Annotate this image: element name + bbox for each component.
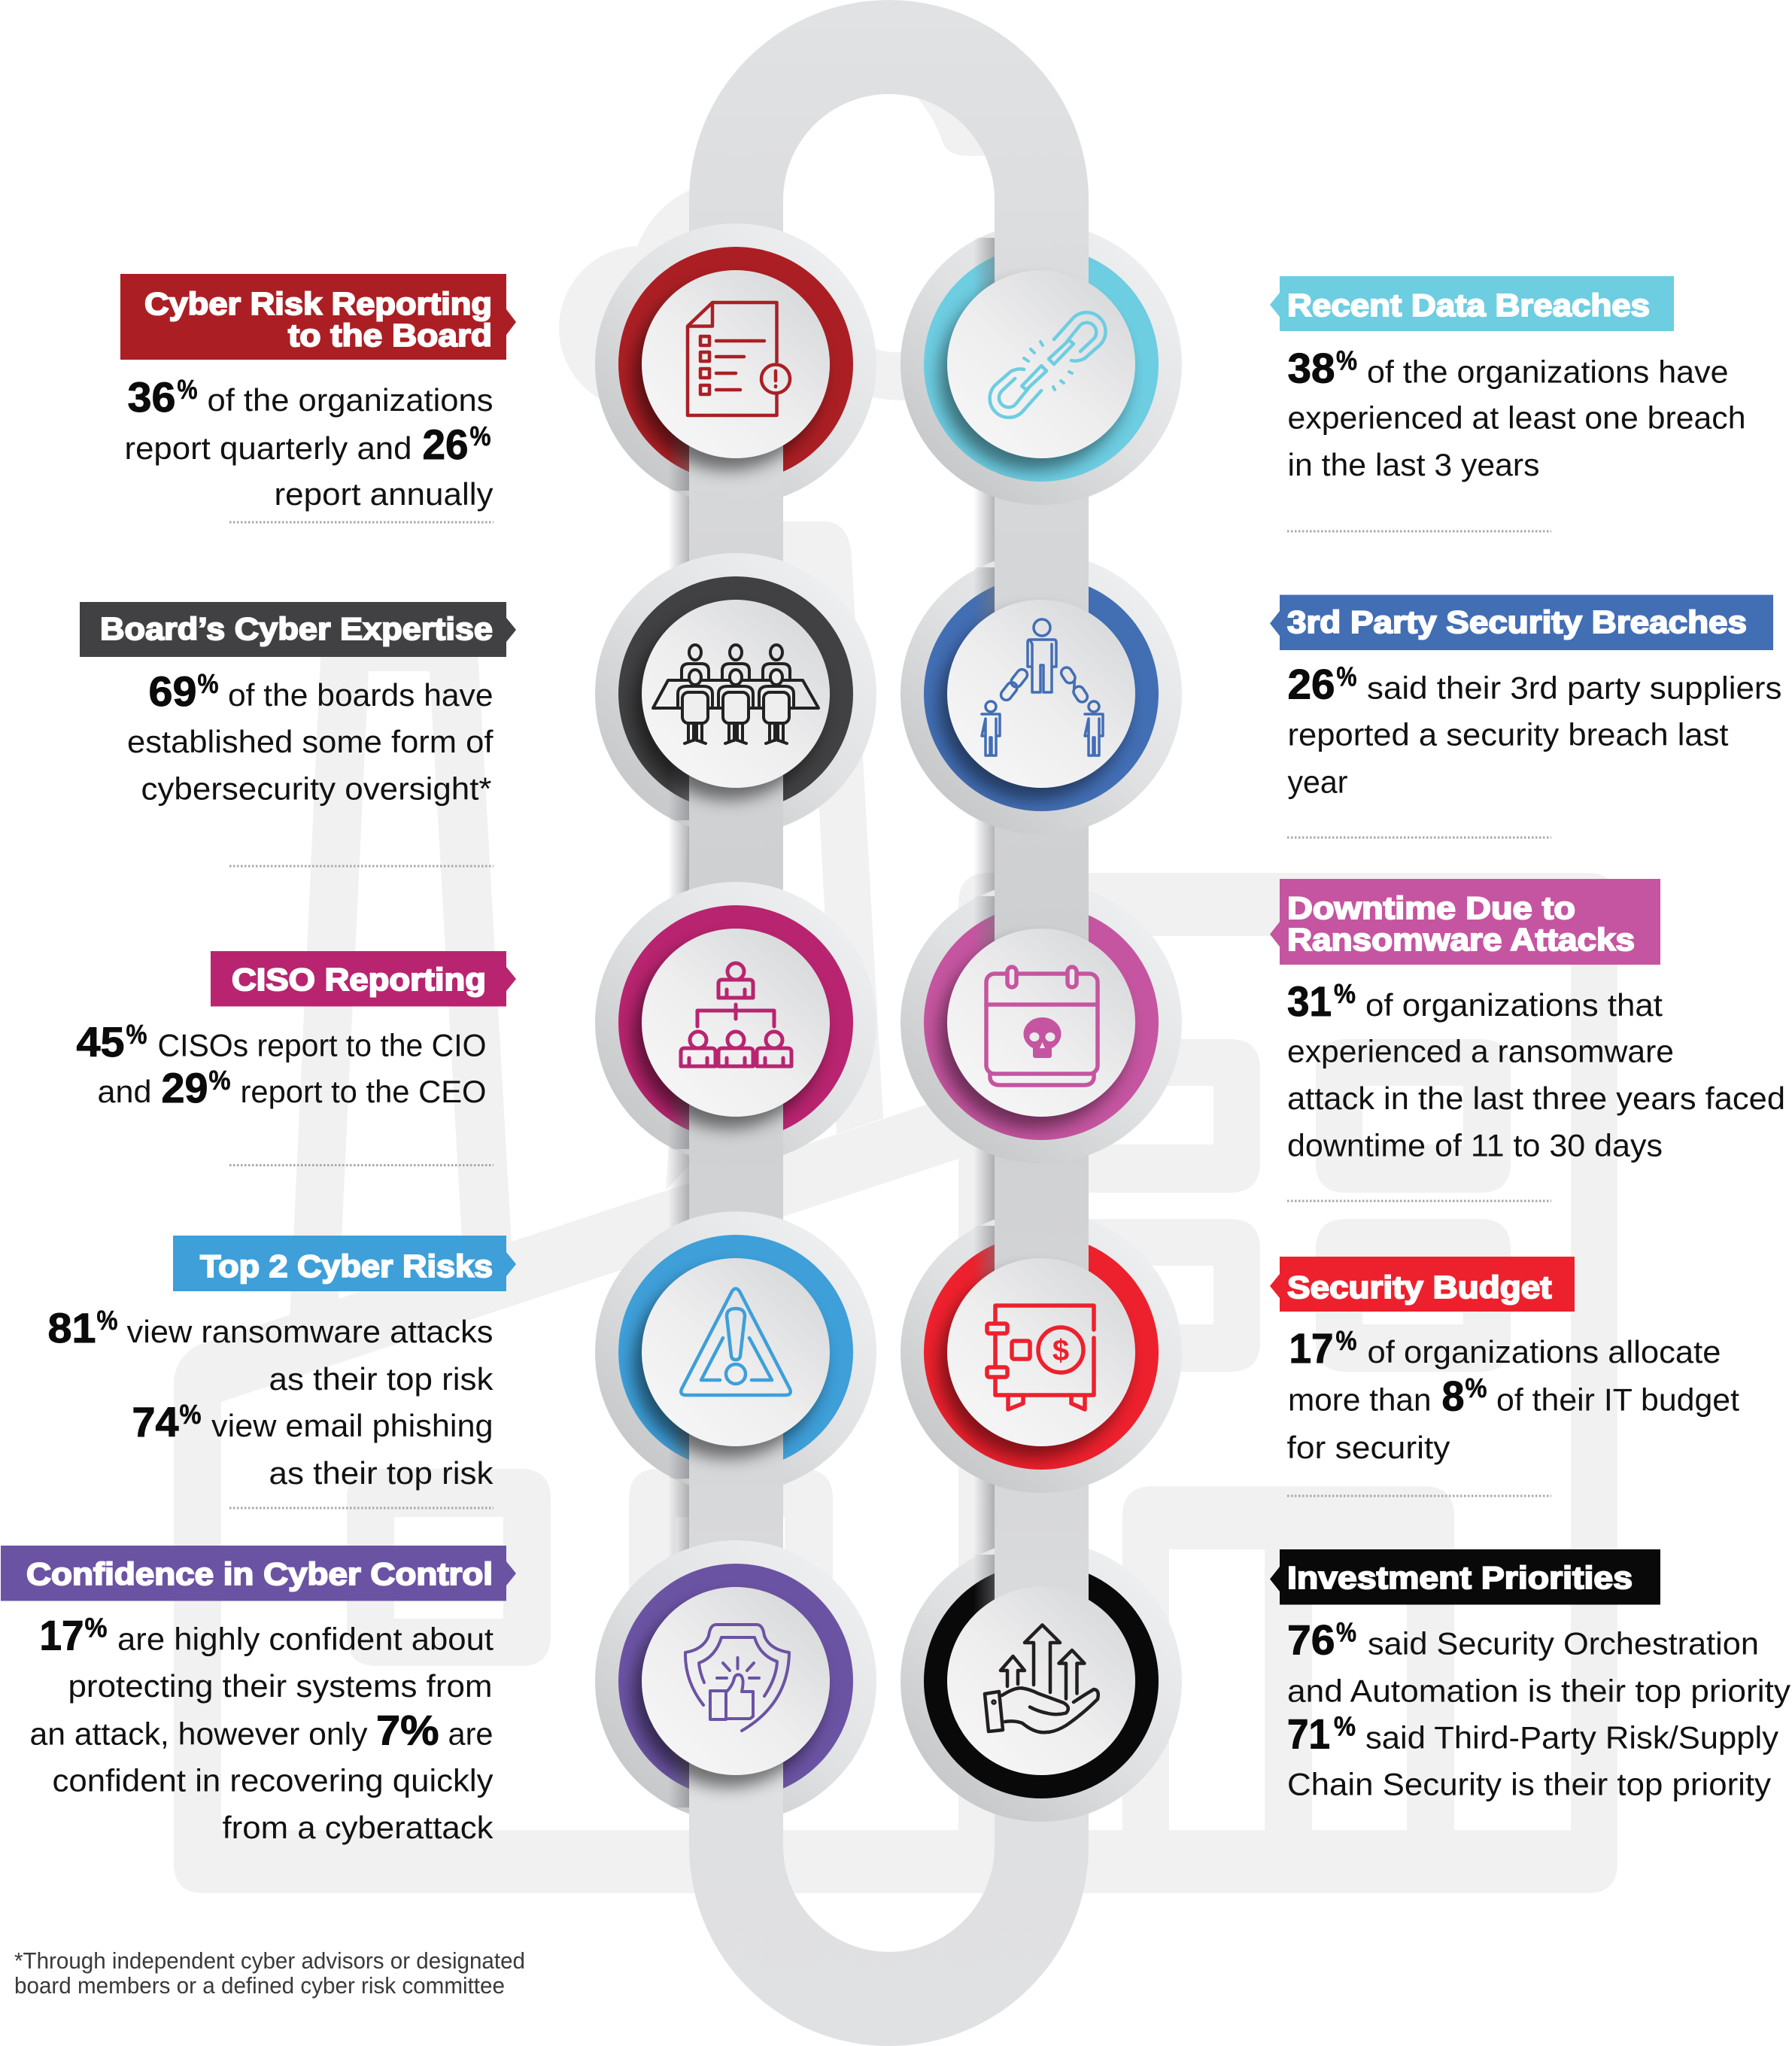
stat text: % <box>1336 1325 1357 1356</box>
stat text: established some form of <box>127 724 494 759</box>
footnote <box>14 1947 525 1999</box>
stat text: as their top risk <box>269 1361 494 1397</box>
panel: recent data breaches <box>1270 276 1745 482</box>
stat text: 31 <box>1287 977 1332 1025</box>
stat text: report to the CEO <box>241 1074 486 1109</box>
stat text <box>48 1304 494 1491</box>
footnote: board members or a defined cyber risk committee <box>14 1972 505 1999</box>
stat text: % <box>84 1612 107 1643</box>
stat text: 17 <box>39 1612 84 1658</box>
icon: document with alert <box>688 302 790 415</box>
stat text: attack in the last three years faced <box>1287 1081 1785 1116</box>
stat text: 8 <box>1441 1373 1464 1419</box>
banner heading: Confidence in Cyber Control <box>26 1556 493 1592</box>
stat text: % <box>1334 1711 1356 1741</box>
icon: warning triangle <box>681 1288 791 1395</box>
stat text <box>77 1018 486 1111</box>
banner heading: to the Board <box>288 318 492 353</box>
banner heading <box>1270 1549 1660 1604</box>
banner heading: Cyber Risk Reporting <box>144 286 492 321</box>
panel: third party security breaches <box>1270 594 1781 799</box>
stat text <box>1286 1324 1739 1465</box>
panel: downtime due to ransomware <box>1270 879 1785 1163</box>
stat text: 17 <box>1289 1324 1333 1372</box>
stat text: % <box>1465 1373 1487 1403</box>
banner heading <box>1270 1257 1575 1312</box>
stat text: 26 <box>423 421 468 468</box>
stat text: of their IT budget <box>1496 1382 1739 1418</box>
band side shadows <box>668 451 995 1686</box>
stat text: protecting their systems from <box>68 1668 492 1704</box>
badge: board cyber expertise <box>595 553 876 844</box>
stat text: 26 <box>1288 661 1335 707</box>
badge: recent data breaches <box>901 214 1182 505</box>
stat text: % <box>469 421 491 451</box>
stat text: % <box>96 1305 117 1336</box>
panel: investment priorities <box>1270 1549 1790 1801</box>
stat text: % <box>1336 345 1357 376</box>
stat text: said their 3rd party suppliers <box>1367 670 1781 706</box>
stat text <box>127 667 494 807</box>
banner heading: Board’s Cyber Expertise <box>100 611 493 646</box>
icon: calendar with skull <box>986 967 1098 1085</box>
badge: top cyber risks <box>595 1211 876 1503</box>
stat text: % <box>178 374 197 405</box>
banner heading: Downtime Due to <box>1287 890 1575 926</box>
icon: shield with thumbs up <box>685 1625 789 1731</box>
stat text: cybersecurity oversight* <box>141 771 492 807</box>
stat text: for security <box>1286 1430 1450 1465</box>
stat text: of organizations that <box>1365 987 1663 1023</box>
stat text: from a cyberattack <box>223 1810 494 1845</box>
footnote: *Through independent cyber advisors or designated <box>14 1947 525 1974</box>
banner heading <box>1270 879 1660 965</box>
stat text: said Third-Party Risk/Supply <box>1365 1720 1778 1755</box>
stat text: CISOs report to the CIO <box>158 1028 486 1063</box>
stat text: Chain Security is their top priority <box>1287 1767 1771 1801</box>
panel: ciso reporting <box>77 951 516 1111</box>
stat text: 74 <box>132 1398 179 1446</box>
stat text: as their top risk <box>269 1455 494 1491</box>
stat text: said Security Orchestration <box>1368 1625 1759 1661</box>
icon: safe with dollar: $ <box>1052 1334 1069 1367</box>
stat text: 69 <box>149 667 197 715</box>
stat text: 36 <box>128 373 176 421</box>
stat text: downtime of 11 to 30 days <box>1287 1127 1663 1163</box>
banner heading <box>80 602 516 657</box>
stat text: in the last 3 years <box>1288 447 1539 482</box>
stat text: % <box>197 668 218 699</box>
badge: ciso reporting <box>595 882 876 1173</box>
banner heading <box>173 1236 516 1291</box>
badge: third party security breaches <box>901 543 1182 835</box>
icon: safe with dollar <box>987 1306 1094 1409</box>
stat text: of the organizations have <box>1367 354 1729 390</box>
stat text <box>30 1612 494 1845</box>
stat text: are <box>448 1716 494 1752</box>
banner heading <box>120 274 516 360</box>
stat text: report quarterly and <box>125 430 412 466</box>
stat text <box>1287 977 1785 1163</box>
stat text: are highly confident about <box>117 1621 494 1657</box>
banner heading: 3rd Party Security Breaches <box>1287 604 1747 640</box>
stat text: 76 <box>1287 1616 1335 1663</box>
banner heading <box>1270 276 1674 331</box>
stat text: report annually <box>274 476 494 512</box>
banner heading <box>1270 594 1773 650</box>
panel: top cyber risks <box>48 1236 516 1491</box>
stat text: experienced a ransomware <box>1287 1034 1674 1069</box>
panel: board cyber expertise <box>80 602 516 807</box>
stat text <box>1287 1616 1790 1801</box>
stat text: 81 <box>48 1304 96 1351</box>
badge: security budget <box>901 1202 1182 1493</box>
banner heading: Top 2 Cyber Risks <box>200 1248 493 1284</box>
panel: confidence in cyber control <box>1 1546 516 1845</box>
stat text: % <box>1336 661 1357 692</box>
panel: cyber risk reporting <box>120 274 516 512</box>
banner heading <box>1 1546 516 1601</box>
stat text: more than <box>1288 1382 1431 1418</box>
stat text: of organizations allocate <box>1368 1334 1721 1370</box>
stat text: an attack, however only <box>30 1716 367 1752</box>
stat text: 38 <box>1288 345 1335 391</box>
stat text: of the boards have <box>228 677 494 713</box>
banner heading: CISO Reporting <box>232 962 486 997</box>
stat text <box>125 373 494 512</box>
icon: hand with rising arrows <box>985 1625 1098 1732</box>
banner heading <box>211 951 516 1007</box>
stat text: and <box>98 1074 152 1109</box>
banner heading: Investment Priorities <box>1287 1560 1633 1595</box>
stat text: year <box>1288 765 1348 799</box>
stat text: experienced at least one breach <box>1288 400 1745 435</box>
panel: security budget <box>1270 1257 1739 1465</box>
stat text: 29 <box>161 1064 208 1111</box>
banner heading: Security Budget <box>1287 1269 1552 1305</box>
stat text: and Automation is their top priority <box>1287 1674 1790 1708</box>
badge: confidence in cyber control <box>595 1540 876 1832</box>
stat text: confident in recovering quickly <box>53 1762 494 1798</box>
stat text: % <box>179 1399 202 1430</box>
badge: investment priorities <box>901 1531 1182 1822</box>
stat text: 71 <box>1287 1710 1330 1758</box>
stat text: 45 <box>77 1018 125 1066</box>
stat text: % <box>209 1065 230 1096</box>
stat text: view ransomware attacks <box>126 1314 494 1349</box>
badge: downtime due to ransomware <box>901 872 1182 1163</box>
stat text <box>1288 661 1781 799</box>
banner heading: Ransomware Attacks <box>1287 922 1635 957</box>
stat text <box>1288 345 1745 482</box>
icon: org chart <box>681 963 791 1066</box>
looping grey band <box>689 0 1089 2046</box>
icon: people connected by chain links <box>982 619 1103 755</box>
stat text: % <box>126 1019 147 1050</box>
banner heading: Recent Data Breaches <box>1287 287 1650 323</box>
icon: boardroom table <box>653 645 819 743</box>
background: faint city skyline with cloud and towers <box>174 90 1617 1893</box>
stat text: 7% <box>376 1707 439 1753</box>
badge: cyber risk reporting <box>595 223 876 515</box>
icon: broken chain link <box>990 312 1106 418</box>
stat text: % <box>1336 1616 1356 1648</box>
stat text: % <box>1334 978 1356 1009</box>
stat text: view email phishing <box>211 1408 494 1443</box>
stat text: reported a security breach last <box>1288 716 1729 752</box>
stat text: of the organizations <box>208 382 494 418</box>
